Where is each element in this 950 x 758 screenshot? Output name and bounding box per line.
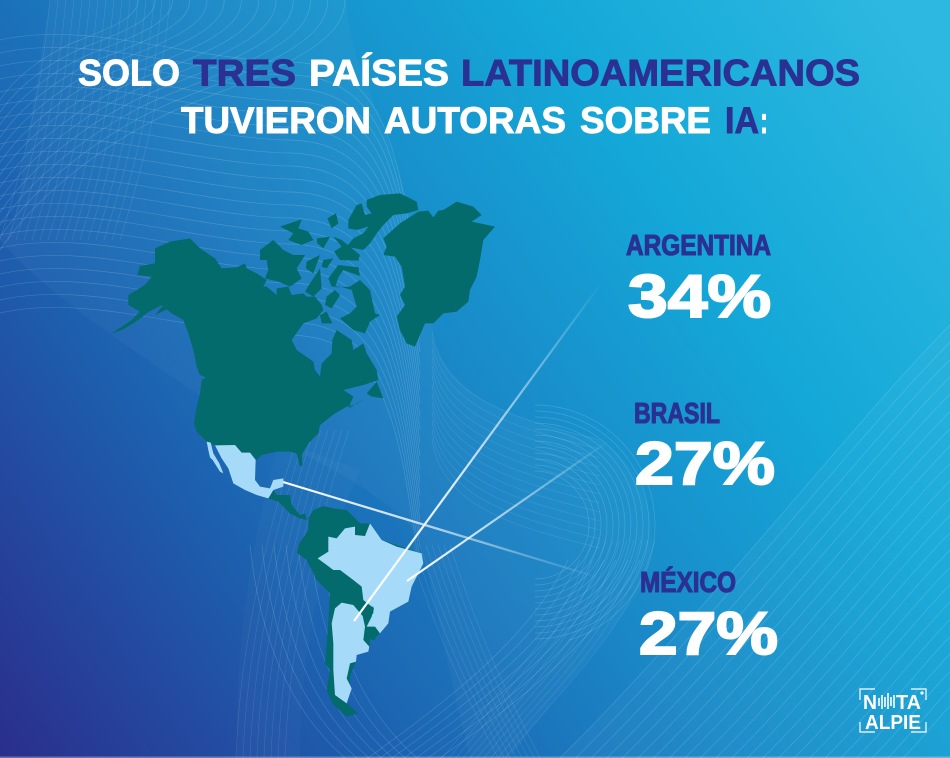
title: TRES: [193, 52, 296, 94]
connector: Mexico: [283, 482, 600, 578]
title: LATINOAMERICANOS: [461, 52, 860, 94]
title: SOLO: [78, 52, 180, 94]
logo: Nota al Pie: N: [863, 692, 877, 714]
title: [78, 52, 860, 141]
map of the Americas: [111, 193, 495, 717]
logo: Nota al Pie: TA: [896, 692, 921, 714]
stat: Brasil: [634, 398, 775, 497]
map: Central and South America: [207, 442, 423, 717]
map: Greenland: [383, 202, 495, 347]
map: Argentina highlighted: [332, 603, 369, 703]
map: Mexico highlighted: [215, 445, 283, 498]
connector: Argentina: [354, 282, 602, 621]
stat: Argentina: 34%: [628, 263, 771, 330]
map: South America: [297, 506, 423, 717]
stat: México: [639, 565, 778, 667]
title: AUTORAS: [384, 100, 566, 141]
stat: México: 27%: [639, 600, 778, 667]
connector: Brazil: [407, 440, 610, 581]
map: Arctic islands: [260, 193, 418, 398]
map: Baja California highlighted: [207, 442, 223, 473]
title: TUVIERON: [181, 100, 371, 141]
stat: Brasil: BRASIL: [634, 398, 720, 430]
title: :: [760, 100, 768, 141]
stat: Brasil: 27%: [635, 430, 775, 497]
title: PAÍSES: [309, 52, 449, 94]
stat: Argentina: [626, 230, 771, 330]
map: Central America: [268, 490, 307, 520]
map: Paraguay and Uruguay: [363, 607, 377, 640]
stat: Argentina: ARGENTINA: [626, 230, 771, 262]
title: IA: [725, 100, 759, 141]
logo: Nota al Pie: [860, 689, 926, 734]
stat: México: MÉXICO: [640, 565, 736, 599]
map: North America mainland: [111, 238, 378, 467]
title: SOBRE: [580, 100, 711, 141]
map: Brazil highlighted: [318, 523, 423, 633]
logo: Nota al Pie: ALPIE: [865, 712, 921, 734]
